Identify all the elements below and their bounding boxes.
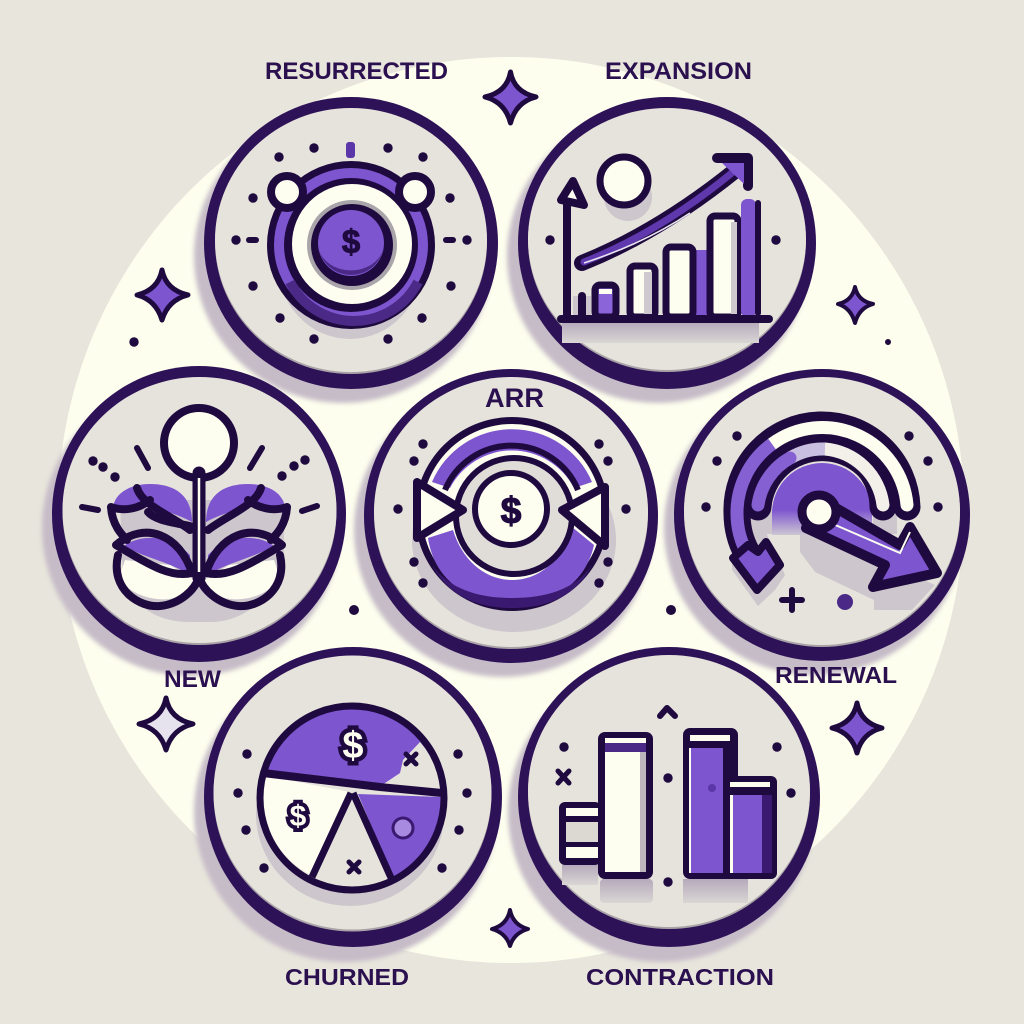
- icon: resurrected dial: $: [342, 223, 360, 260]
- chart: pie: $: [290, 800, 307, 833]
- label: resurrected: RESURRECTED: [265, 58, 448, 85]
- icon: arr cycle: $: [501, 490, 522, 531]
- icon: sparkle left: [137, 270, 188, 320]
- label: expansion: EXPANSION: [605, 58, 752, 85]
- panel: expansion: [507, 97, 816, 403]
- panel: contraction: [508, 647, 820, 962]
- icon: sparkle bottom: [492, 910, 528, 946]
- side dots: [701, 431, 943, 512]
- side dots: [233, 749, 472, 873]
- icon: resurrected dial: [267, 142, 435, 339]
- label: new: NEW: [164, 666, 221, 693]
- icon: sprouting plant: [111, 408, 287, 622]
- large cream background circle: [58, 57, 964, 963]
- icon: renewal arrows: [732, 425, 937, 610]
- label: renewal: RENEWAL: [775, 662, 897, 688]
- panel: churned: [194, 647, 502, 962]
- panel: arr: [354, 369, 658, 677]
- label: churned: CHURNED: [285, 964, 409, 990]
- label: contraction: CONTRACTION: [586, 964, 774, 990]
- side marks: [558, 708, 796, 887]
- icon: arr cycle: [412, 417, 616, 632]
- dial tick dots: [231, 143, 472, 344]
- chart: shrinking bars: [559, 728, 777, 903]
- icon: growth chart: [557, 157, 773, 343]
- panel: renewal: [664, 369, 970, 675]
- chart: pie: $: [342, 725, 364, 767]
- panel: resurrected: [194, 97, 498, 403]
- chart: pie: [256, 705, 444, 906]
- rays and dots: [82, 448, 317, 511]
- scattered dots: [129, 337, 891, 615]
- icon: sparkle lower left: [139, 698, 193, 750]
- icon: sparkle lower right: [832, 703, 882, 753]
- icon: sparkle right: [838, 287, 873, 323]
- panel: new: [42, 366, 346, 676]
- side dots: [545, 235, 781, 245]
- icon: sparkle top: [485, 72, 536, 123]
- side dots: [393, 439, 631, 588]
- label: arr: ARR: [485, 383, 544, 413]
